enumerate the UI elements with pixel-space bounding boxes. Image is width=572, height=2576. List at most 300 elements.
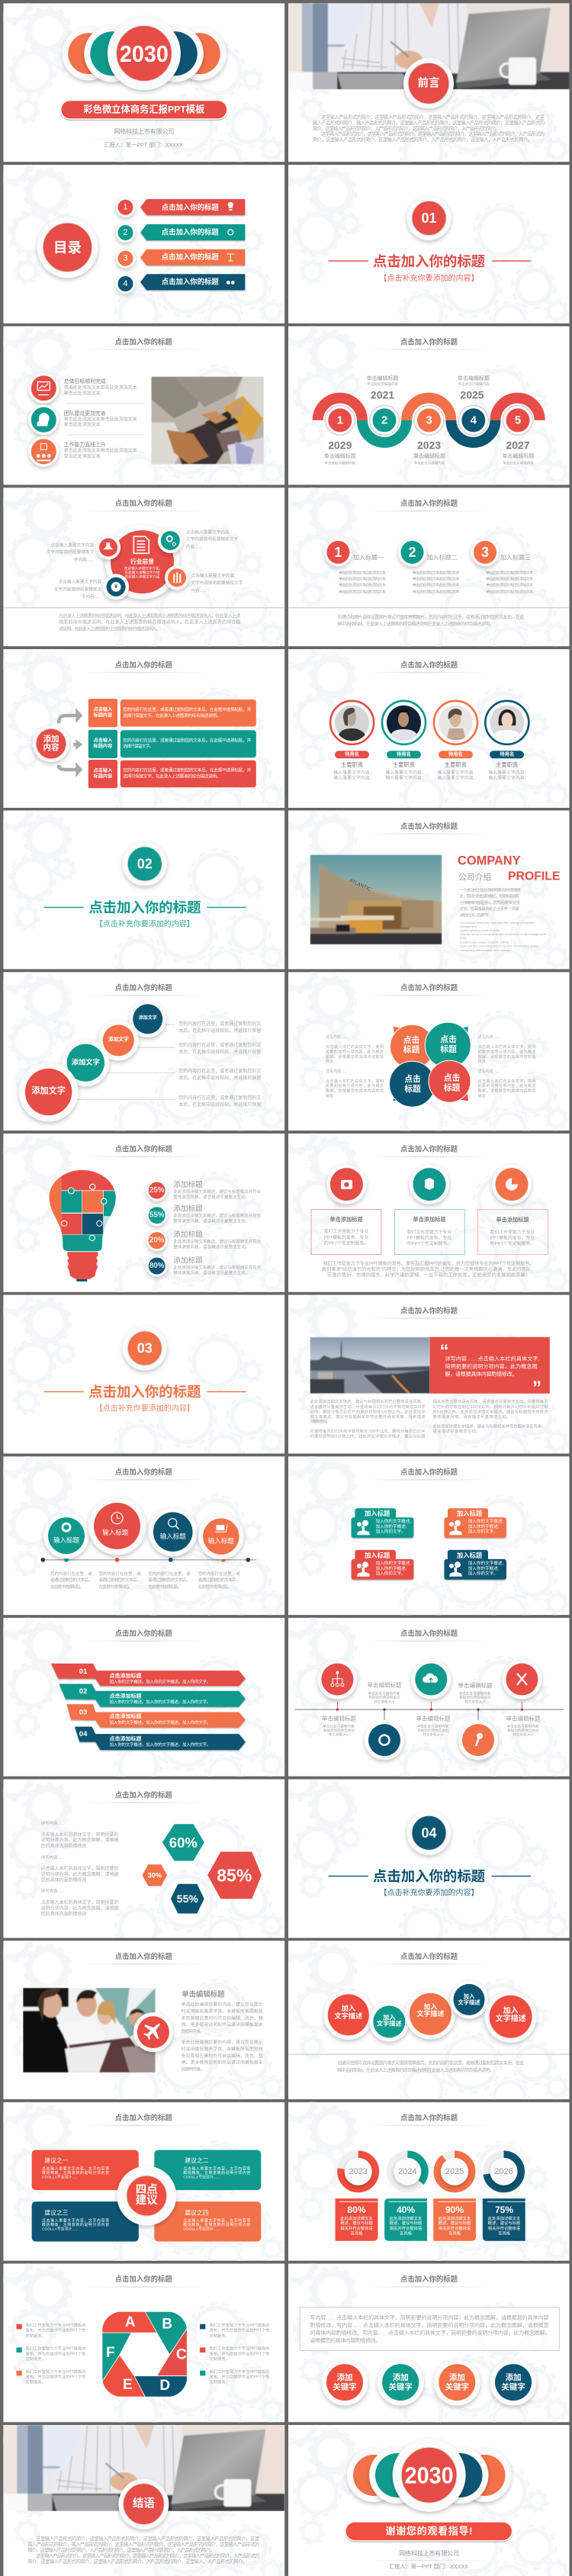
suggestion 2: 建议之二 <box>185 2156 209 2164</box>
donut 2023: 2023 <box>349 2167 368 2176</box>
item 2 <box>398 539 459 594</box>
disc 1: 加入 <box>342 2004 355 2012</box>
slide: foreword <box>288 3 569 162</box>
heading: 点击加入你的标题 <box>400 1952 458 1960</box>
timeline captions: 单击此处可编辑内容 <box>503 460 534 465</box>
left paragraph: 尽量简洁生动。 <box>310 1418 329 1424</box>
quote panel: ” <box>532 1378 541 1398</box>
disc: red: 添加文字 <box>31 1085 66 1096</box>
title pill: 彩色微立体商务汇报PPT模板 <box>83 103 205 114</box>
team member 2: 待用名 <box>397 751 411 757</box>
year labels <box>328 389 530 452</box>
node 5 <box>503 405 532 435</box>
row 1: 标题内容 <box>94 712 112 719</box>
left notes <box>326 1034 384 1098</box>
card: red <box>352 1550 413 1580</box>
right paragraph: 整体语言风格，语言描述尽量简洁生动。 <box>433 1413 511 1420</box>
goal 1: 单击此处添加文本单击此处添加文本 <box>64 384 137 391</box>
slide: team photo <box>3 1941 285 2099</box>
stat 25%: 添加标题 <box>173 1180 203 1189</box>
timeline captions: 您的内容打在这里，或 <box>50 1571 92 1577</box>
summary text <box>337 2060 524 2073</box>
English profile text: excellent and unique corporate culture. <box>460 941 509 944</box>
stat card 90%: 相关并符合整体语 <box>439 2225 471 2231</box>
right legend: 定制服务。 <box>210 2378 230 2385</box>
card: navy: 加入标题 <box>457 1552 483 1559</box>
item 1: 单击此处添加文本此处添加文本 <box>339 570 386 576</box>
stat 55%: 添加标题 <box>173 1204 203 1214</box>
card 1: 单击添加标题 <box>329 1216 363 1223</box>
node 5: 5 <box>515 413 521 426</box>
central disc <box>105 525 180 600</box>
timeline captions <box>324 375 534 465</box>
card: navy: 加入你的文字。 <box>468 1570 498 1576</box>
card 3 <box>478 1165 548 1255</box>
ribbon 03 <box>67 1704 246 1727</box>
hexagon 60% <box>162 1824 204 1861</box>
company title: PROFILE <box>508 870 560 883</box>
captions below axis: 单击编辑标题 <box>322 1714 356 1722</box>
item 2: 加入标题二 <box>427 553 458 561</box>
left notes: 点击输入本栏的具体文字，简明 <box>326 1079 384 1084</box>
foreword text: 这里输入产品形式的介，这里输入产品形式的简介，这里输入产品形式的简介，这里输入产品形式的简介，入产品形式的 <box>321 130 545 137</box>
arrows <box>59 708 82 777</box>
slide: team <box>288 649 569 808</box>
donut 2026 <box>487 2154 521 2189</box>
timeline captions: 单击此处可编辑内容 <box>414 460 445 465</box>
title pill <box>61 101 227 119</box>
ribbon 02 <box>59 1684 246 1707</box>
left notes: 扼要的说明分项内容，此为概念 <box>326 1049 384 1054</box>
disc: teal: 添加文字 <box>72 1058 100 1066</box>
goal 2 <box>28 404 137 435</box>
keyword disc 4 <box>490 2359 537 2406</box>
card: teal: 加入标题 <box>365 1510 390 1517</box>
text box <box>300 2307 559 2350</box>
English profile text: enterprising determination and courage! <box>460 949 511 952</box>
team member 2: 主要职责 <box>393 761 415 768</box>
side notes: 点击输入重要文字内容, <box>191 572 236 578</box>
right legend: 定制服务。 <box>210 2356 230 2362</box>
left legend: 定制服务。 <box>26 2356 46 2362</box>
foreword text: 这里输入产品形式的简介，这里输入产品形式的简介，这里输入产品形式的简介，这里输入产品形式的简介，这里 <box>321 113 545 120</box>
stat card 80%: 概述，建议与标题 <box>340 2220 373 2226</box>
contents item 4 <box>116 274 245 294</box>
stat 80%: 80% <box>149 1262 165 1270</box>
card 1 <box>311 1165 381 1255</box>
right captions <box>178 1021 261 1108</box>
goal 2: 团队建设更加完善 <box>64 410 106 416</box>
shutter ring diagram: C <box>176 2347 187 2363</box>
profile text <box>460 886 521 918</box>
wave band <box>318 398 540 442</box>
timeline captions: 您的内容打在这里，或 <box>99 1571 141 1577</box>
side notes: 内容...... <box>191 587 207 593</box>
left legend: 发布。并为您提供专业的PPT个性 <box>26 2350 86 2356</box>
goal 3: 单击此处添加文本 <box>64 453 101 459</box>
axis <box>294 1702 564 1720</box>
ribbon 04: 04 <box>79 1730 88 1738</box>
lobe: navy: 标题 <box>404 1083 421 1094</box>
stat card 40%: 概述，建议与标题 <box>390 2220 423 2226</box>
right paragraph: 幻灯片的字数控制在200字以内，据统计每页幻灯片的最好控制 <box>433 1404 548 1410</box>
left paragraph: 以内，据统计每页幻灯片的最好控制在5分钟之内。此处添加详 <box>310 1408 426 1414</box>
left text: 详写内容...... <box>41 1888 65 1894</box>
side notes: 字内容...... <box>74 557 95 563</box>
left legend: 定制服务。 <box>26 2333 46 2339</box>
slide: hexagons <box>3 1779 285 1938</box>
heading: 点击加入你的标题 <box>115 2114 172 2122</box>
left paragraph: 细文本描述，建议与标题相关并符合整体语言风格，语言描述 <box>310 1413 426 1420</box>
stat 25%: 整体演宣风格，语言概述尽量整洁生动。 <box>173 1194 249 1200</box>
left legend: 我们工作室致力于专业PPT模板的 <box>26 2322 86 2328</box>
left legend: 定制服务。 <box>26 2378 46 2385</box>
stat 20%: 此处添加详细文本概述，建议与标题相关并符合 <box>173 1239 262 1245</box>
captions below axis: 单击此处可编辑内容, <box>507 1724 539 1729</box>
section badge 03: 03 <box>137 1341 153 1356</box>
left notes: 扼要的说明分项内容，此为概念 <box>326 1083 384 1089</box>
disc: teal: 输入标题 <box>53 1536 79 1544</box>
slide: company profile <box>288 810 569 969</box>
heading: 点击加入你的标题 <box>400 822 458 830</box>
disc: teal <box>62 1039 109 1086</box>
team member 2 <box>382 701 426 780</box>
stat card 90%: 概述，建议与标题 <box>439 2220 471 2226</box>
card 2: 的PPT个性定制服务。 <box>407 1240 451 1246</box>
item 1: 单击此处添加文本此处添加文本 <box>339 576 386 582</box>
disc: navy <box>130 1001 166 1037</box>
node 2 <box>369 405 400 435</box>
disc 1 <box>323 1990 373 2040</box>
disc 1: 文字描述 <box>334 2012 362 2020</box>
captions below axis: 单击此处可编辑内容, <box>417 1724 449 1729</box>
plane badge <box>133 2012 173 2052</box>
captions below axis: 单击编辑标题 <box>416 1714 451 1722</box>
ribbon 01: 01 <box>79 1667 88 1676</box>
keyword disc 3: 添加 <box>449 2372 465 2382</box>
row 3 <box>88 760 256 788</box>
captions above axis: 单击编辑标题 <box>458 1681 493 1689</box>
foreword text <box>313 113 545 143</box>
lobe: red <box>429 1060 471 1102</box>
row 3: 点击输入 <box>94 767 113 773</box>
goal 1: 单击此处添加文本 <box>64 390 101 396</box>
hexagon 30% <box>142 1864 167 1886</box>
team member 4: 待用名 <box>500 751 514 757</box>
disc: orange <box>198 1513 244 1559</box>
section title: 点击加入你的标题 <box>373 253 485 269</box>
heading: 点击加入你的标题 <box>115 1790 172 1799</box>
card: red: 加入你的文字。 <box>376 1570 406 1576</box>
heading: 点击加入你的标题 <box>115 337 172 346</box>
English profile text: have the sense of competition and cooperation of the management <box>460 933 546 936</box>
goal 2: 单击此处添加文本单击此处添加文本 <box>64 416 137 422</box>
right legend: 我们工作室致力于专业PPT模板的 <box>210 2346 270 2352</box>
captions above axis: 根据您的需要自由拉 <box>459 1695 491 1700</box>
right captions: 本后，在此框中选择粘贴，并选择只保留 <box>178 1049 261 1055</box>
team member 1: 输入重要文字内容, <box>334 769 371 775</box>
team member 4: 主要职责 <box>496 761 518 768</box>
slide: light bulb <box>3 1134 285 1292</box>
central badge: 建议 <box>136 2193 158 2207</box>
suggestion 3: COOLLA专业设计...... <box>42 2227 79 2232</box>
stat 20% <box>146 1230 262 1251</box>
right legend <box>200 2322 270 2385</box>
section badge 02: 02 <box>137 856 153 871</box>
heading: 点击加入你的标题 <box>400 1306 458 1314</box>
heading: 点击加入你的标题 <box>115 2275 172 2283</box>
heading: 点击加入你的标题 <box>115 1629 172 1638</box>
section badge 01: 01 <box>421 211 437 226</box>
lobe: teal: 标题 <box>440 1044 457 1054</box>
timeline captions: 单击此处可编辑内容 <box>367 381 398 387</box>
row 3: 标题内容 <box>94 773 112 780</box>
right paragraphs <box>182 2001 263 2072</box>
right legend: 我们工作室致力于专业PPT模板的 <box>210 2322 270 2328</box>
shutter ring diagram <box>102 2311 187 2397</box>
lobe: navy: 点击 <box>404 1073 421 1084</box>
card 2: 单击添加标题 <box>413 1216 446 1223</box>
profile text: 一个成功的企业必须拥有整科学的管理理 <box>460 886 521 892</box>
stat card 75%: 此处添加详细文本 <box>488 2215 521 2221</box>
quote panel: 简明扼要的说明分项内容，此为概念图 <box>445 1363 537 1370</box>
right notes: 详写内容...... <box>478 1069 500 1074</box>
disc: navy: 添加文字 <box>139 1015 157 1021</box>
team member 1: 输入重要文字内容, <box>334 774 371 780</box>
slide: section 03 <box>3 1295 285 1454</box>
left notes: 详写内容...... <box>326 1034 347 1040</box>
team member 3: 输入重要文字内容, <box>438 774 475 780</box>
section title: 点击加入你的标题 <box>373 1868 485 1884</box>
suggestion 3: 建议之三 <box>44 2208 69 2216</box>
photo: office worker with laptop <box>288 3 570 89</box>
disc 3 <box>405 1989 455 2039</box>
contents item 4: 4 <box>123 279 128 288</box>
stat 25% <box>146 1180 262 1201</box>
left text: 说明分项内容，此为概念图解，请根据 <box>41 1871 119 1877</box>
row 1 <box>88 699 256 727</box>
disc 5 <box>485 1991 537 2043</box>
shutter ring diagram: B <box>162 2317 172 2333</box>
goal 1: 总体目标顺利完成 <box>64 378 106 384</box>
timeline captions: 您的内容打在这里，或 <box>198 1571 240 1577</box>
slide: arrows and boxes <box>3 649 285 808</box>
orange satellite <box>165 565 189 590</box>
captions above axis: 单击此处可编辑内容, <box>459 1690 491 1696</box>
contents item 2: 点击加入你的标题 <box>162 227 219 236</box>
ribbon 04: 加入你的文字概述。加入你的文字概述。加入你的文字。 <box>109 1741 211 1748</box>
captions below axis: 根据您的需要自由拉 <box>323 1728 355 1733</box>
right captions: 您的内容打在这里，或者通过复制您的文 <box>178 1042 261 1048</box>
donut 2023 <box>341 2154 375 2189</box>
card: orange: 加入你的文字。 <box>468 1528 498 1534</box>
right notes: 图解，请根据您的具体内容酌情 <box>478 1054 536 1060</box>
item 3: 加入标题三 <box>500 553 531 561</box>
goal 2: 单击此处添加文本 <box>64 422 101 428</box>
disc 4 <box>450 1980 488 2018</box>
heading: 点击加入你的标题 <box>400 1145 458 1153</box>
heading: 点击加入你的标题 <box>115 661 172 669</box>
disc 3: 文字描述 <box>416 2009 444 2018</box>
slide: industry outlook <box>3 487 285 647</box>
left legend: 发布。并为您提供专业的PPT个性 <box>26 2374 86 2380</box>
slide: cover <box>3 3 285 162</box>
card 3: PPT模板的发布。专业 <box>490 1235 535 1241</box>
summary text <box>322 1261 535 1278</box>
section badge 04: 04 <box>421 1825 437 1841</box>
suggestion 2: 概括精炼，言简意赅的说明分项内容 <box>183 2170 250 2176</box>
stat card 80%: 相关并符合整体语 <box>340 2225 373 2231</box>
slide: donut charts <box>288 2102 569 2261</box>
left text <box>41 1820 119 1917</box>
left text: 您的具体内容酌情修改 <box>41 1877 87 1883</box>
keyword disc 4: 关键字 <box>501 2381 525 2391</box>
profile text: 合作精神的管理团队，优秀而独特的企业 <box>460 899 521 905</box>
item 3: 单击此处添加文本此处添加文本 <box>486 576 533 582</box>
item 3: 单击此处添加文本此处添加文本 <box>486 588 533 594</box>
stat card 40%: 言风格 <box>400 2230 413 2237</box>
shutter ring diagram: A <box>125 2314 136 2330</box>
contents item 3: 点击加入你的标题 <box>162 252 219 261</box>
timeline captions: 在此框中选择粘贴。 <box>198 1584 232 1590</box>
left text: 点击输入本栏的具体文字，简明扼要的 <box>41 1866 119 1872</box>
lobe: orange: 点击 <box>403 1034 419 1045</box>
stat card 80%: 此处添加详细文本 <box>340 2215 373 2221</box>
shutter ring diagram: E <box>123 2377 133 2393</box>
slide: people cards <box>288 1456 569 1616</box>
foreword text: 简介，这里输入产品形式的简介，这里输入产品形式的简介，入产品形式的简介，这里输入，入产品形式的简介。 <box>313 136 532 143</box>
central badge <box>117 2166 176 2226</box>
summary text: 图表的综合描述说明，在此录入上述图表的综合描述说明入。在此录入上述图表的综合描 <box>59 619 240 626</box>
section subtitle: 【点击补充你要添加的内容】 <box>380 273 479 283</box>
node: lifebuoy <box>365 1720 404 1760</box>
section subtitle: 【点击补充你要添加的内容】 <box>95 1403 194 1413</box>
captions above axis <box>368 1681 493 1704</box>
thank-you pill <box>345 2522 513 2541</box>
card: teal <box>352 1508 413 1538</box>
heading: 点击加入你的标题 <box>115 1145 172 1153</box>
ribbon 01: 加入你的文字概述。加入你的文字概述。加入你的文字。 <box>109 1679 211 1685</box>
closing text: 这里输入产品形式的简介，这里输入产品形式的简介，这里输入产品形式的简介，这里输入产品形式的简介，这里 <box>36 2535 259 2542</box>
left legend: 我们工作室致力于专业PPT模板的 <box>26 2369 86 2375</box>
keyword disc 1: 关键字 <box>333 2381 357 2391</box>
donut 2025 <box>437 2154 472 2189</box>
team member 2: 输入重要文字内容, <box>386 774 423 780</box>
captions below axis: 单击此处可编辑内容, <box>323 1724 355 1729</box>
contents item 1 <box>116 198 245 217</box>
item 3: 3 <box>481 545 489 560</box>
suggestion 4: COOLLA专业设计...... <box>183 2227 220 2232</box>
stat 55%: 整体演宣风格，语言概述尽量整洁生动。 <box>173 1218 249 1224</box>
photo: city skyline <box>310 1336 430 1394</box>
section title: 点击加入你的标题 <box>88 899 201 915</box>
closing badge: 结语 <box>133 2497 155 2510</box>
left paragraph: 此处添加详细文本描述，建议与标题相关并符合整体语言风格， <box>310 1398 426 1404</box>
ribbon 02: 02 <box>79 1687 87 1696</box>
slide: thank you <box>288 2425 569 2576</box>
stacked coloured discs with 2030: 2030 <box>405 2462 454 2488</box>
suggestion 1: 点击输入重要文字内容，文字内容需 <box>42 2166 109 2171</box>
closing text <box>27 2535 259 2565</box>
node: tools <box>502 1660 541 1700</box>
card 3: 的PPT个性定制服务。 <box>490 1240 535 1246</box>
slide: timeline wave <box>288 326 569 485</box>
left notes: 修改 <box>326 1093 333 1098</box>
row 1: 点击输入 <box>94 706 113 712</box>
suggestion 2: COOLLA专业设计...... <box>183 2175 220 2180</box>
quote panel: 解，请根据具体内容酌情修改。 <box>445 1370 517 1377</box>
slide: three cards <box>288 1134 569 1292</box>
ribbon 01 <box>51 1664 246 1686</box>
timeline captions: 在此框中选择粘贴。 <box>50 1584 84 1590</box>
suggestion 3: 点击输入重要文字内容，文字内容需 <box>42 2217 109 2223</box>
right captions: 本后，在此框中选择粘贴，并选择只保留 <box>178 1101 261 1108</box>
heading: 点击加入你的标题 <box>400 1468 458 1476</box>
keyword disc 2 <box>378 2359 424 2406</box>
side notes <box>47 529 243 600</box>
item 2: 单击此处添加文本此处添加文本 <box>412 570 459 576</box>
slide: ABCDEF ring <box>3 2263 285 2423</box>
shutter ring diagram: D <box>159 2378 170 2394</box>
timeline captions: 单击编辑标题 <box>413 452 445 459</box>
side notes: 点击输入重要文字内容 <box>58 579 102 585</box>
stat 55%: 55% <box>149 1211 165 1220</box>
stat card 75%: 75% <box>495 2205 513 2215</box>
summary text: 我们工作室致力于专业PPT模板的发布、课件及汇报PPT的美化，并为您提供专业的PPT个性定制服务。 <box>323 1261 534 1267</box>
left notes: 点击输入本栏的具体文字，简明 <box>326 1044 384 1050</box>
left text: 说明分项内容，此为概念图解，请根据 <box>41 1837 119 1843</box>
company title <box>458 854 560 883</box>
stat 25%: 25% <box>149 1186 165 1195</box>
item 1 <box>324 539 386 594</box>
card: orange <box>444 1508 506 1538</box>
stat card 75%: 概述，建议与标题 <box>488 2220 521 2226</box>
card 3: 我们工作室致力于专业 <box>490 1229 535 1235</box>
suggestion 1: 概括精炼，言简意赅的说明分项内容 <box>42 2170 109 2176</box>
item 1: 加入标题一 <box>353 553 384 561</box>
contents item 1: 1 <box>123 203 128 212</box>
stat 20%: 20% <box>149 1237 165 1245</box>
left paragraph <box>310 1398 426 1439</box>
card: red: 加入你的文字概述, <box>376 1560 411 1566</box>
side notes: 点击输入重要文字内容, <box>186 529 231 535</box>
year labels: 2029 <box>328 439 352 452</box>
origin badge: 内容 <box>43 742 59 752</box>
right notes: 详写内容...... <box>478 1034 500 1040</box>
team member 3 <box>434 701 477 780</box>
item 3: 单击此处添加文本此处添加文本 <box>486 582 533 588</box>
hexagon 30%: 30% <box>148 1871 162 1879</box>
item 1: 单击此处添加文本此处添加文本 <box>339 582 386 588</box>
team member 1 <box>330 701 374 780</box>
right captions: 您的内容打在这里，或者通过复制您的文 <box>178 1068 261 1074</box>
ribbon 02: 加入你的文字概述。加入你的文字概述。加入你的文字。 <box>109 1699 211 1705</box>
item 1: 1 <box>334 545 342 560</box>
keyword disc 1 <box>322 2359 368 2406</box>
foreword badge: 前言 <box>418 76 439 89</box>
heading: 点击加入你的标题 <box>115 983 172 992</box>
contents badge: 目录 <box>53 240 82 256</box>
heading: 点击加入你的标题 <box>400 983 458 992</box>
card: navy: 加入你的字概述, <box>468 1565 500 1571</box>
icon: document <box>133 536 149 553</box>
section title: 点击加入你的标题 <box>88 1384 201 1400</box>
English profile text: management, <box>460 925 477 928</box>
closing text: 这里输入产品形式的介，这里输入产品形式的简介，这里输入产品形式的简介，这里输入产品形式的简介，入产品形式的 <box>36 2552 259 2558</box>
hexagon 55% <box>171 1884 204 1913</box>
lobe: teal: 点击 <box>440 1034 457 1044</box>
contents item 3: 3 <box>123 254 128 263</box>
